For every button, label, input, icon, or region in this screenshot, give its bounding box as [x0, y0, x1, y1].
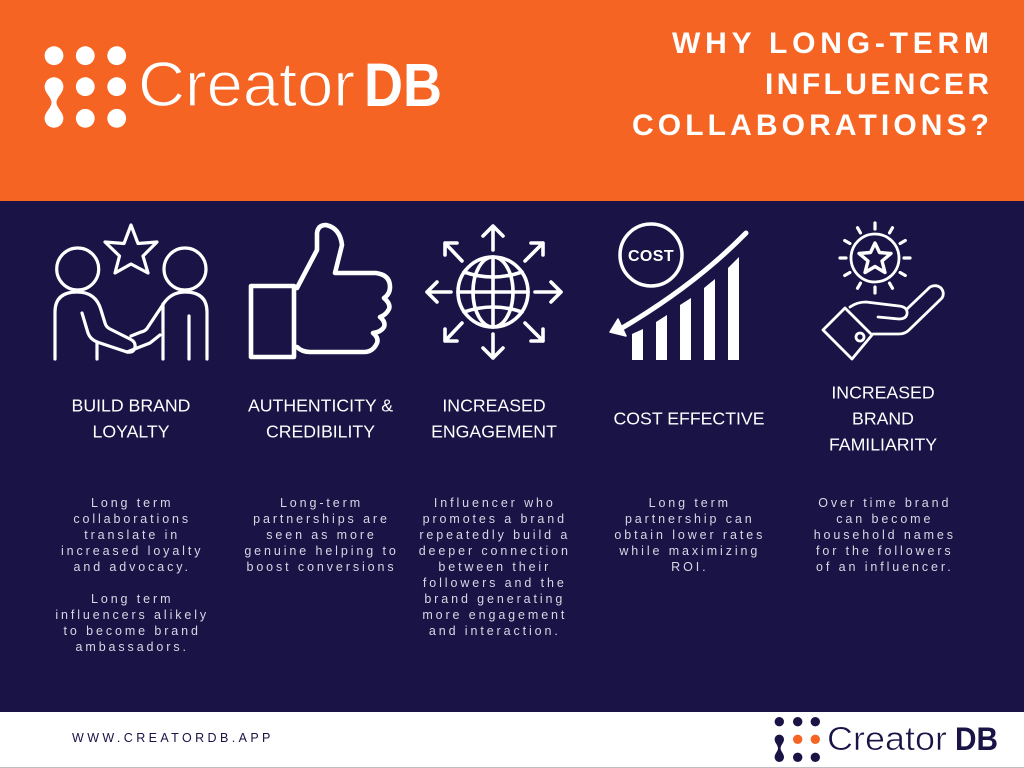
text: build brand loyalty description: translate in — [84, 528, 180, 542]
footer website: WWW.CREATORDB.APP — [72, 731, 274, 745]
text: brand familiarity description: for the followers — [816, 544, 954, 558]
text: engagement description: more engagement — [422, 608, 567, 622]
icon: thumbs up — [251, 225, 390, 357]
icon: cost with rising bars — [610, 224, 746, 360]
text: build brand loyalty description: increased loyalty — [61, 544, 203, 558]
heading: authenticity and credibility: CREDIBILITY — [266, 422, 375, 442]
text: brand familiarity description: of an influencer. — [816, 560, 954, 574]
heading: build brand loyalty — [72, 396, 190, 442]
heading: build brand loyalty: LOYALTY — [92, 422, 170, 442]
logo: CreatorDB header — [45, 46, 442, 128]
text: brand familiarity description: Over time brand — [818, 496, 951, 510]
text: build brand loyalty description: influencers alikely — [55, 608, 209, 622]
text: brand familiarity description — [814, 496, 956, 574]
logo: CreatorDB footer: Creator — [827, 720, 947, 757]
text: engagement description: followers and the — [423, 576, 567, 590]
text: build brand loyalty description: Long term — [91, 496, 173, 510]
heading: increased brand familiarity: FAMILIARITY — [829, 434, 937, 454]
heading: build brand loyalty: BUILD BRAND — [72, 396, 190, 416]
text: brand familiarity description: household names — [814, 528, 956, 542]
text: cost effective description: obtain lower rates — [614, 528, 765, 542]
text: authenticity description: genuine helping to — [244, 544, 399, 558]
text: engagement description: and interaction. — [429, 624, 561, 638]
heading: increased engagement: INCREASED — [442, 396, 546, 416]
text: cost effective description: Long term — [649, 496, 731, 510]
text: authenticity description: partnerships are — [253, 512, 390, 526]
text: build brand loyalty description — [55, 496, 209, 654]
icon: cost with rising bars: COST — [628, 248, 674, 265]
text: cost effective description: ROI. — [671, 560, 708, 574]
icon: hand holding star — [823, 223, 943, 359]
text: build brand loyalty description: Long term — [91, 592, 173, 606]
heading: authenticity and credibility — [248, 396, 393, 442]
heading: increased brand familiarity: BRAND — [852, 408, 914, 428]
text: engagement description: brand generating — [424, 592, 565, 606]
text: build brand loyalty description: ambassadors. — [76, 640, 189, 654]
heading: increased engagement — [431, 396, 557, 442]
text: engagement description: Influencer who — [434, 496, 556, 510]
logo: CreatorDB footer: DB — [955, 721, 998, 757]
icon: globe with arrows — [427, 226, 561, 358]
text: authenticity description: boost conversions — [246, 560, 397, 574]
heading: increased brand familiarity: INCREASED — [831, 382, 935, 402]
text: engagement description: deeper connection — [419, 544, 571, 558]
logo: CreatorDB header: DB — [364, 51, 442, 119]
heading: authenticity and credibility: AUTHENTICITY & — [248, 396, 393, 416]
heading: cost effective: COST EFFECTIVE — [613, 408, 765, 428]
text: build brand loyalty description: and advocacy. — [74, 560, 191, 574]
title: COLLABORATIONS? — [632, 109, 989, 142]
heading: increased engagement: ENGAGEMENT — [431, 422, 557, 442]
text: engagement description: promotes a brand — [423, 512, 567, 526]
logo: CreatorDB header: Creator — [138, 50, 355, 120]
panel: white footer — [0, 712, 1024, 768]
text: cost effective description: while maximizing — [618, 544, 760, 558]
text: brand familiarity description: can become — [836, 512, 933, 526]
text: authenticity description: seen as more — [266, 528, 377, 542]
title — [632, 27, 989, 142]
text: cost effective description — [614, 496, 765, 574]
title: INFLUENCER — [765, 68, 989, 101]
panel: navy content area — [0, 201, 1024, 712]
text: cost effective description: partnership can — [625, 512, 755, 526]
text: engagement description: repeatedly build a — [419, 528, 570, 542]
text: build brand loyalty description: to become brand — [64, 624, 201, 638]
footer bottom rule — [0, 767, 1024, 768]
panel: orange header — [0, 0, 1024, 201]
text: authenticity description: Long-term — [280, 496, 363, 510]
logo: CreatorDB footer — [775, 717, 998, 762]
icon: handshake with star — [55, 225, 207, 359]
text: build brand loyalty description: collaborations — [73, 512, 191, 526]
heading: increased brand familiarity — [829, 382, 937, 454]
text: engagement description — [419, 496, 571, 638]
text: authenticity description — [244, 496, 399, 574]
title: WHY LONG-TERM — [672, 27, 989, 60]
text: engagement description: between their — [438, 560, 551, 574]
